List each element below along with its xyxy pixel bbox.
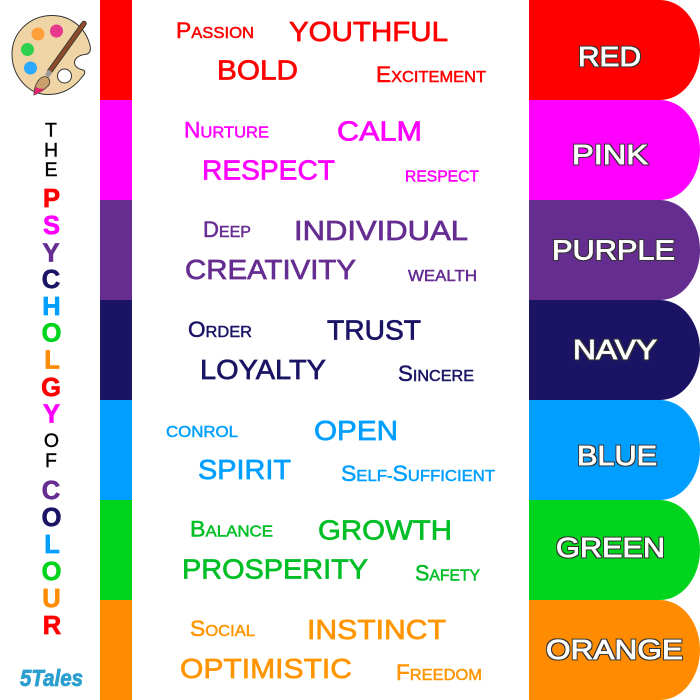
word: nurture: NURTURE	[184, 118, 269, 142]
word: sincere: SINCERE	[398, 361, 474, 386]
title: the psychology of colour: L	[44, 531, 60, 559]
panel: green	[100, 500, 700, 600]
word: wealth: WEALTH	[408, 268, 477, 285]
colour band	[100, 0, 132, 100]
label: red: RED	[578, 41, 641, 72]
title: the psychology of colour: O	[42, 504, 61, 532]
word: creativity: CREATIVITY	[185, 254, 356, 285]
colour band	[100, 500, 132, 600]
word: instinct: INSTINCT	[307, 614, 446, 645]
word: individual: INDIVIDUAL	[294, 215, 468, 246]
word: calm: CALM	[337, 116, 422, 146]
title: the psychology of colour: E	[44, 159, 58, 181]
word: freedom: FREEDOM	[396, 660, 482, 685]
word: respect: RESPECT	[202, 154, 335, 186]
word: social: SOCIAL	[190, 616, 255, 641]
panel: blue	[100, 400, 700, 500]
title: the psychology of colour: U	[42, 585, 61, 613]
tab: green	[529, 500, 700, 600]
word: safety: SAFETY	[415, 560, 480, 586]
word: prosperity: PROSPERITY	[182, 554, 368, 584]
word: self-sufficient: SELF-SUFFICIENT	[341, 461, 495, 486]
panel: orange	[100, 600, 700, 700]
title: the psychology of colour: P	[43, 185, 60, 213]
title: the psychology of colour: F	[45, 450, 57, 472]
label: blue: BLUE	[577, 440, 657, 471]
word: balance: BALANCE	[190, 516, 273, 542]
title: the psychology of colour: O	[42, 558, 61, 586]
word: growth: GROWTH	[318, 514, 452, 546]
tab: pink	[529, 100, 700, 200]
title: the psychology of colour: O	[44, 430, 59, 452]
label: navy: NAVY	[573, 334, 657, 365]
title: the psychology of colour: C	[42, 477, 60, 505]
title: the psychology of colour: S	[43, 212, 60, 240]
panel: navy	[100, 300, 700, 400]
label: purple: PURPLE	[552, 234, 675, 266]
panel: pink	[100, 100, 700, 200]
word: deep: DEEP	[203, 217, 251, 242]
label: green: GREEN	[556, 532, 665, 563]
word: trust: TRUST	[327, 314, 421, 346]
tab: orange	[529, 600, 700, 700]
label: orange: ORANGE	[546, 634, 683, 665]
word: excitement: EXCITEMENT	[376, 62, 486, 87]
title: the psychology of colour: H	[42, 293, 61, 321]
title: the psychology of colour: O	[42, 320, 61, 348]
word: spirit: SPIRIT	[198, 454, 291, 485]
title: the psychology of colour: H	[44, 140, 58, 162]
label: pink: PINK	[572, 139, 649, 170]
colour band	[100, 200, 132, 300]
panel: red	[100, 0, 700, 100]
word: youthful: YOUTHFUL	[289, 16, 448, 47]
colour band	[100, 600, 132, 700]
colour band	[100, 100, 132, 200]
word: optimistic: OPTIMISTIC	[180, 653, 352, 684]
colour band	[100, 300, 132, 400]
word: respect small: RESPECT	[405, 168, 479, 186]
word: order: ORDER	[188, 317, 252, 342]
word: loyalty: LOYALTY	[200, 354, 326, 385]
word: passion: PASSION	[176, 18, 254, 43]
panel: purple	[100, 200, 700, 300]
title: the psychology of colour: L	[44, 346, 60, 374]
tab: navy	[529, 300, 700, 400]
word: bold: BOLD	[217, 54, 298, 86]
title: the psychology of colour: T	[45, 120, 57, 142]
tab: purple	[529, 200, 700, 300]
word: conrol: CONROL	[166, 424, 238, 441]
title: the psychology of colour	[41, 120, 61, 640]
title: the psychology of colour: G	[41, 374, 61, 402]
logo: 5Tales: 5Tales	[20, 665, 83, 691]
title: the psychology of colour: R	[43, 612, 61, 640]
icon: paint palette	[12, 15, 90, 95]
title: the psychology of colour: Y	[43, 400, 60, 428]
tab: red	[529, 0, 700, 100]
title: the psychology of colour: Y	[42, 240, 60, 268]
title: the psychology of colour: C	[42, 266, 60, 294]
colour band	[100, 400, 132, 500]
tab: blue	[529, 400, 700, 500]
word: open: OPEN	[314, 415, 398, 446]
